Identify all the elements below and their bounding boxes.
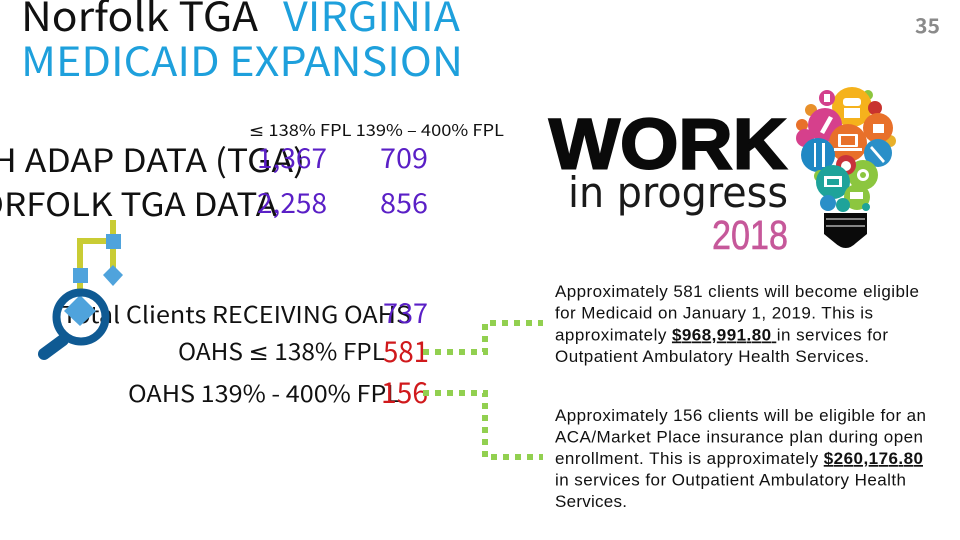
- note: marketplace eligibility: ACA/Market Place insurance plan during open: [555, 428, 923, 446]
- label: OAHS 139 to 400%: OAHS 139% - 400% FPL: [128, 375, 400, 409]
- logo wordmark: [549, 106, 788, 258]
- icon: light bulb: [796, 87, 896, 248]
- note: Medicaid eligibility: Outpatient Ambulatory Health Services.: [555, 347, 869, 366]
- note: Medicaid eligibility: for Medicaid on January 1, 2019. This is: [555, 304, 873, 322]
- logo wordmark: 2018: [712, 212, 788, 258]
- title: MEDICAID EXPANSION: [21, 30, 463, 88]
- arrow: connector to Medicaid note: [423, 323, 543, 352]
- note: marketplace eligibility: enrollment. This is approximately $260,176.80: [555, 449, 923, 468]
- row values: Norfolk TGA data: 2,258: [257, 182, 327, 221]
- row values: Norfolk TGA data: 856: [380, 182, 428, 221]
- note: marketplace eligibility: Services.: [555, 492, 627, 511]
- icon: magnifier with flowchart: [44, 220, 123, 354]
- value: 156: 156: [381, 370, 428, 412]
- page number: 35: [915, 10, 940, 39]
- column headers: ≤ 138% FPL 139% – 400% FPL: [249, 117, 504, 141]
- label: OAHS at or below 138%: OAHS ≤ 138% FPL: [178, 333, 385, 367]
- value: 581: 581: [383, 329, 429, 371]
- logo wordmark: in progress: [568, 168, 788, 217]
- note: marketplace eligibility: in services for Outpatient Ambulatory Health: [555, 470, 906, 490]
- logo: work in progress 2018: [549, 87, 896, 258]
- arrow: connector to marketplace note: [423, 393, 543, 457]
- logo wordmark: WORK: [549, 106, 787, 184]
- title: [21, 0, 463, 88]
- note: Medicaid eligibility: Approximately 581 clients will become eligible: [555, 282, 919, 301]
- row values: ADAP data: 1,367: [257, 137, 327, 176]
- note: marketplace eligibility: [555, 406, 926, 511]
- row values: ADAP data: [257, 137, 428, 176]
- OAHS client breakdown: [62, 292, 429, 412]
- note: Medicaid eligibility: approximately $968,991.80 in services for: [555, 326, 888, 344]
- row values: Norfolk TGA data: [257, 182, 428, 221]
- table: FPL data: [0, 117, 504, 226]
- row values: ADAP data: 709: [380, 137, 428, 176]
- value: 737: 737: [383, 292, 428, 331]
- note: Medicaid eligibility: [555, 282, 919, 366]
- label: total clients: Total Clients RECEIVING OAHS: [62, 296, 411, 330]
- note: marketplace eligibility: Approximately 156 clients will be eligible for an: [555, 406, 926, 425]
